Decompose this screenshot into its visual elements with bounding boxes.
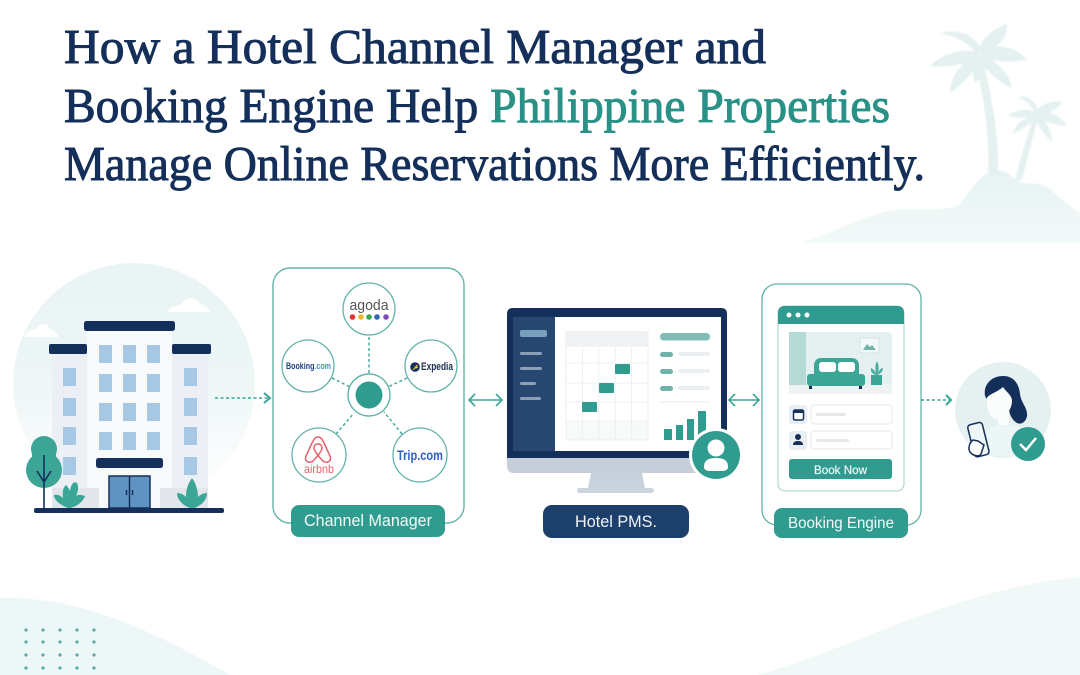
label: booking engine	[774, 508, 908, 538]
arrow: PMS to booking engine	[729, 394, 759, 406]
label: booking engine: Booking Engine	[788, 515, 894, 532]
icon: user badge	[689, 428, 743, 482]
icon: tree	[26, 436, 62, 508]
title: Manage Online Reservations More Efficiently.	[64, 136, 925, 191]
label: channel manager: Channel Manager	[304, 512, 432, 530]
arrow: hotel to channel manager	[215, 393, 270, 403]
icon: check badge	[1011, 427, 1045, 461]
title	[64, 19, 925, 191]
label: hotel PMS	[543, 505, 689, 538]
room image	[789, 332, 892, 394]
phone and hand	[967, 422, 990, 457]
calendar	[566, 331, 648, 440]
hotel illustration	[13, 263, 255, 513]
icon: left bush	[54, 482, 85, 508]
arrow: channel manager to PMS	[469, 394, 502, 406]
panel: booking engine	[762, 284, 921, 538]
button: book now: Book Now	[814, 463, 867, 477]
logo: trip.com: Trip.com	[397, 447, 443, 463]
button: book now	[789, 459, 892, 479]
hair	[985, 376, 1027, 424]
title: How a Hotel Channel Manager and	[64, 19, 766, 74]
background: palm trees and island	[800, 24, 1080, 243]
neck	[998, 410, 1009, 425]
logo: agoda: agoda	[350, 297, 389, 314]
dot grid	[24, 628, 96, 670]
hub	[348, 374, 390, 416]
logo: trip.com	[393, 428, 447, 482]
icon: right bush	[177, 478, 207, 508]
face	[987, 387, 1012, 419]
title: Booking Engine Help Philippine Properties	[64, 78, 890, 133]
icon: guest with phone	[955, 362, 1051, 461]
side list	[660, 333, 710, 402]
arrow: booking engine to guest	[921, 395, 951, 405]
bar chart	[664, 411, 706, 440]
date field	[789, 405, 892, 424]
panel: hotel PMS monitor	[507, 308, 743, 538]
logo: agoda	[343, 283, 395, 335]
ground line	[34, 508, 224, 513]
logo: expedia: Expedia	[421, 361, 454, 373]
logo: booking.com	[282, 340, 334, 392]
logo: airbnb	[292, 428, 346, 482]
background: bottom left wave	[0, 598, 230, 675]
guest field	[789, 431, 892, 450]
logo: airbnb: airbnb	[304, 462, 334, 476]
panel: channel manager	[273, 268, 464, 537]
label: hotel PMS: Hotel PMS.	[575, 513, 657, 531]
body	[982, 425, 1032, 456]
background: bottom right wave	[757, 577, 1080, 675]
label: channel manager	[291, 505, 445, 537]
logo: expedia	[405, 340, 457, 392]
sidebar menu	[520, 330, 547, 400]
logo: booking.com: Booking.com	[286, 361, 331, 371]
connectors	[332, 337, 407, 434]
